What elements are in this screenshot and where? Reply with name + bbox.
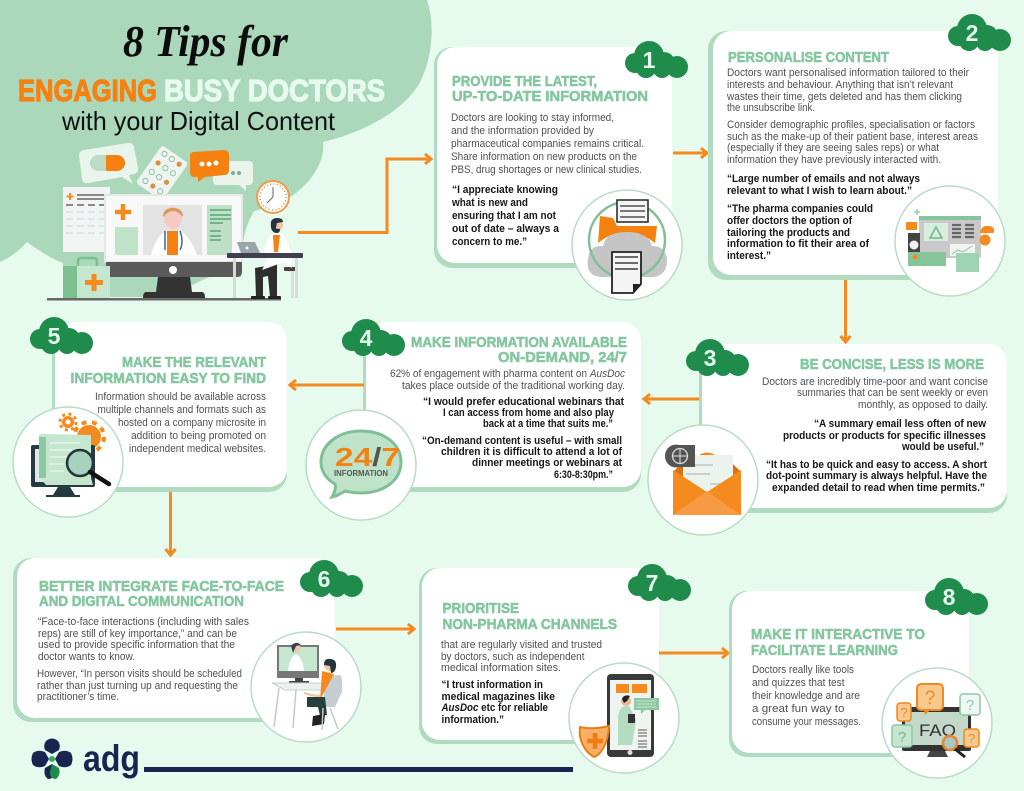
icon circle: 24/7 speech bubble: 24 /7	[335, 442, 400, 472]
body text: tip 6: However, “In person visits should be scheduled	[37, 668, 242, 680]
icon circle: FAQ monitor: ?	[968, 731, 975, 746]
panel: tip 4	[306, 319, 641, 520]
quotes: tip 4: “On-demand content is useful – with small	[422, 435, 622, 447]
quotes: tip 3	[766, 418, 987, 494]
icon circle: 24/7 speech bubble: INFORMATION	[334, 469, 388, 478]
body text: tip 7: by doctors, such as independent	[441, 651, 584, 663]
body text: tip 8	[752, 664, 861, 728]
quotes: tip 2	[727, 173, 920, 262]
body text: tip 2: such as the make-up of their patient base, interest areas	[727, 131, 978, 143]
number badge 6	[300, 560, 363, 597]
heading: tip 8: FACILITATE LEARNING	[751, 642, 898, 659]
heading: tip 1: PROVIDE THE LATEST,	[452, 73, 597, 90]
quotes: tip 4: dinner meetings or webinars at	[472, 457, 622, 469]
body text: tip 5: multiple channels and formats such as	[98, 404, 266, 416]
number badge 3: 3	[704, 345, 716, 371]
desk and laptop	[227, 242, 303, 298]
quotes: tip 3: would be useful.”	[901, 441, 984, 453]
quotes: tip 2: “Large number of emails and not always	[727, 173, 920, 185]
body text: tip 7: that are regularly visited and trusted	[441, 639, 602, 651]
icon circle: video consultation	[251, 632, 361, 742]
body text: tip 2: (especially if they are seeing sales reps) or what	[727, 142, 939, 154]
monitor	[105, 195, 242, 298]
body text: tip 1: Doctors are looking to stay informed,	[451, 112, 614, 124]
body text: tip 2: Consider demographic profiles, specialisation or factors	[727, 119, 975, 131]
heading: tip 5	[70, 354, 266, 387]
panel: tip 3	[648, 339, 1007, 535]
panel: tip 8	[729, 578, 992, 778]
body text: tip 4	[390, 368, 625, 392]
quotes: tip 4	[422, 396, 624, 481]
title: 8 Tips for	[123, 17, 289, 66]
quotes: tip 4: back at a time that suits me.”	[483, 418, 613, 430]
body text: tip 3: monthly, as opposed to daily.	[858, 399, 988, 411]
body text: tip 6: used to provide specific information that the	[38, 639, 235, 651]
header illustration: doctor and computer	[47, 143, 303, 300]
quotes: tip 2: interest.”	[727, 250, 771, 262]
body text: tip 6: “Face-to-face interactions (including with sales	[38, 616, 249, 628]
quote: tip 1: ensuring that I am not	[452, 210, 556, 222]
logo: adg	[32, 738, 573, 779]
quotes: tip 3: dot-point summary is always helpful. Have the	[766, 470, 987, 482]
icon circle: search and gears	[13, 407, 123, 517]
logo wordmark: adg	[83, 738, 140, 779]
heading: tip 1: UP-TO-DATE INFORMATION	[452, 88, 648, 105]
title: with your Digital Content	[61, 106, 336, 136]
quotes: tip 3: “It has to be quick and easy to access. A short	[766, 459, 987, 471]
number badge 2: 2	[966, 20, 978, 46]
body text: tip 3	[762, 376, 988, 411]
arrow: tip 2 to tip 3	[840, 280, 850, 342]
body text: tip 8: Doctors really like tools	[752, 664, 854, 676]
title: ENGAGING	[18, 73, 157, 108]
body text: tip 6: practitioner’s time.	[37, 691, 119, 703]
arrow: tip 4 to tip 5	[290, 380, 364, 390]
icon circle: FAQ monitor: ?	[900, 705, 908, 720]
icon circle: personalised dashboard	[895, 186, 1005, 296]
body text: tip 5: Information should be available across	[95, 391, 266, 403]
arrow: header to tip 1	[298, 154, 431, 232]
body text: tip 7: medical information sites.	[441, 662, 561, 674]
quotes: tip 4: children it is difficult to attend a lot of	[441, 446, 622, 458]
panel: tip 2	[708, 14, 1011, 296]
heading: tip 7: NON-PHARMA CHANNELS	[442, 616, 617, 633]
body text: tip 6: reps) are still of key importance,” and can be	[38, 628, 237, 640]
arrow: tip 6 to tip 7	[336, 624, 414, 634]
medical record document	[63, 187, 110, 252]
number badge 4	[342, 319, 405, 356]
heading: tip 5: MAKE THE RELEVANT	[122, 354, 266, 371]
body text: tip 2: information they have previously interacted with.	[727, 154, 941, 166]
heading: tip 4	[411, 334, 627, 366]
header cloud background	[0, 0, 432, 297]
panel: tip 6	[13, 558, 363, 742]
number badge 1	[625, 41, 688, 78]
number badge 2	[948, 14, 1011, 51]
body text: tip 5: independent medical websites.	[129, 443, 266, 455]
heading: tip 1	[452, 73, 648, 105]
body text: tip 1: PBS, drug shortages or new clinical studies.	[451, 164, 642, 176]
number badge 4: 4	[360, 325, 373, 351]
logo rule	[144, 767, 573, 772]
logo mark	[32, 738, 72, 779]
body text: tip 1	[451, 112, 644, 176]
icon circle: FAQ monitor: ?	[966, 697, 974, 714]
quotes: tip 4: I can access from home and also play	[443, 407, 615, 419]
quote: tip 1: what is new and	[451, 197, 528, 209]
body text: tip 1: Share information on new products on the	[451, 151, 637, 163]
number badge 8: 8	[943, 584, 956, 610]
quote: tip 1	[451, 184, 560, 248]
quote: tip 7	[441, 679, 555, 726]
number badge 5: 5	[48, 323, 61, 349]
icon circle: FAQ monitor: FAQ	[919, 721, 956, 740]
panel: tip 1	[434, 41, 688, 300]
body text: tip 4: takes place outside of the traditional working day.	[402, 380, 625, 392]
quotes: tip 2: tailoring the products and	[727, 227, 850, 239]
quotes: tip 2: offer doctors the option of	[727, 215, 852, 227]
quotes: tip 4: 6:30-8:30pm.”	[554, 469, 613, 481]
heading: tip 8	[751, 626, 925, 659]
orange chat bubble	[190, 150, 229, 182]
heading: tip 6: AND DIGITAL COMMUNICATION	[39, 593, 244, 610]
heading: tip 6	[39, 578, 284, 610]
quotes: tip 3: “A summary email less often of new	[814, 418, 986, 430]
heading: tip 3: BE CONCISE, LESS IS MORE	[800, 356, 984, 373]
body text: tip 5: hosted on a company microsite in	[118, 417, 266, 429]
number badge 1: 1	[643, 47, 656, 73]
body text: tip 2: the unsubscribe link.	[727, 102, 815, 114]
icon circle: FAQ monitor: ?	[898, 729, 906, 746]
icon circle: FAQ monitor	[882, 668, 992, 778]
heading: tip 6: BETTER INTEGRATE FACE-TO-FACE	[39, 578, 284, 595]
number badge 7	[628, 564, 691, 601]
quote: tip 7: AusDoc etc for reliable	[441, 702, 548, 714]
quotes: tip 2: “The pharma companies could	[727, 203, 873, 215]
body text: tip 8: and quizzes that test	[752, 677, 844, 689]
quote: tip 7: information.”	[442, 714, 504, 726]
body text: tip 1: pharmaceutical companies remains critical.	[451, 138, 644, 150]
body text: tip 2: Doctors want personalised information tailored to their	[727, 67, 969, 79]
body text: tip 2	[726, 67, 978, 166]
quote: tip 7: “I trust information in	[442, 679, 543, 691]
seated doctor	[251, 218, 296, 299]
heading: tip 5: INFORMATION EASY TO FIND	[70, 370, 266, 387]
body text: tip 6: doctor wants to know.	[38, 651, 135, 663]
number badge 3	[686, 339, 749, 376]
number badge 8	[925, 578, 988, 615]
body text: tip 6	[37, 616, 249, 703]
panel: tip 7	[419, 564, 691, 773]
title	[18, 17, 385, 136]
quotes: tip 2: relevant to what I wish to learn about.”	[727, 185, 912, 197]
body text: tip 2: interests and behaviour. Anything that isn’t relevant	[727, 79, 953, 91]
body text: tip 5	[95, 391, 266, 455]
arrow: tip 7 to tip 8	[659, 648, 728, 658]
quote: tip 1: out of date – always a	[452, 223, 560, 235]
quotes: tip 4: “I would prefer educational webinars that	[423, 396, 624, 408]
body text: tip 3: Doctors are incredibly time-poor and want concise	[762, 376, 988, 388]
heading: tip 4: ON-DEMAND, 24/7	[498, 349, 627, 366]
number badge 6: 6	[318, 566, 330, 592]
body text: tip 8: their knowledge and are	[752, 690, 860, 702]
pill speech bubble	[79, 143, 138, 184]
icon circle: email envelope	[648, 425, 758, 535]
arrow: tip 1 to tip 2	[673, 148, 707, 158]
body text: tip 3: summaries that can be sent weekly or even	[797, 387, 988, 399]
quotes: tip 3: expanded detail to read when time permits.”	[772, 482, 985, 494]
body text: tip 8: a great fun way to	[752, 703, 844, 715]
heading: tip 8: MAKE IT INTERACTIVE TO	[751, 626, 925, 643]
panel: tip 5	[13, 317, 287, 517]
body text: tip 7	[441, 639, 602, 674]
title: BUSY DOCTORS	[164, 73, 385, 108]
body text: tip 8: consume your messages.	[752, 716, 861, 728]
heading: tip 2: PERSONALISE CONTENT	[728, 49, 889, 66]
grey chat bubble	[213, 161, 253, 191]
heading: tip 7	[442, 600, 617, 633]
arrow: tip 3 to tip 4	[644, 394, 699, 404]
icon circle: 24/7 speech bubble	[306, 410, 416, 520]
quotes: tip 3: products or products for specific illnesses	[783, 430, 986, 442]
body text: tip 2: wastes their time, gets deleted and has them clicking	[726, 91, 962, 103]
number badge 5	[30, 317, 93, 354]
blister pack	[136, 145, 188, 201]
quote: tip 7: medical magazines like	[442, 691, 555, 703]
quote: tip 1: concern to me.”	[452, 236, 527, 248]
number badge 7: 7	[646, 570, 658, 596]
ground line	[47, 298, 281, 300]
arrow: tip 5 to tip 6	[166, 492, 176, 555]
heading: tip 4: MAKE INFORMATION AVAILABLE	[411, 334, 627, 351]
body text: tip 6: rather than just turning up and requesting the	[37, 680, 238, 692]
icon circle: FAQ monitor: ?	[925, 688, 935, 709]
body text: tip 4: 62% of engagement with pharma content on AusDoc	[390, 368, 625, 380]
icon circle: cloud documents	[572, 190, 682, 300]
body text: tip 5: addition to being promoted on	[131, 430, 266, 442]
clock	[257, 181, 289, 213]
body text: tip 1: and the information provided by	[451, 125, 594, 137]
icon circle: phone with doctor	[569, 663, 679, 773]
first aid kit	[63, 258, 110, 298]
quotes: tip 2: information to fit their area of	[727, 238, 869, 250]
heading: tip 7: PRIORITISE	[442, 600, 519, 617]
quote: tip 1: “I appreciate knowing	[452, 184, 558, 196]
